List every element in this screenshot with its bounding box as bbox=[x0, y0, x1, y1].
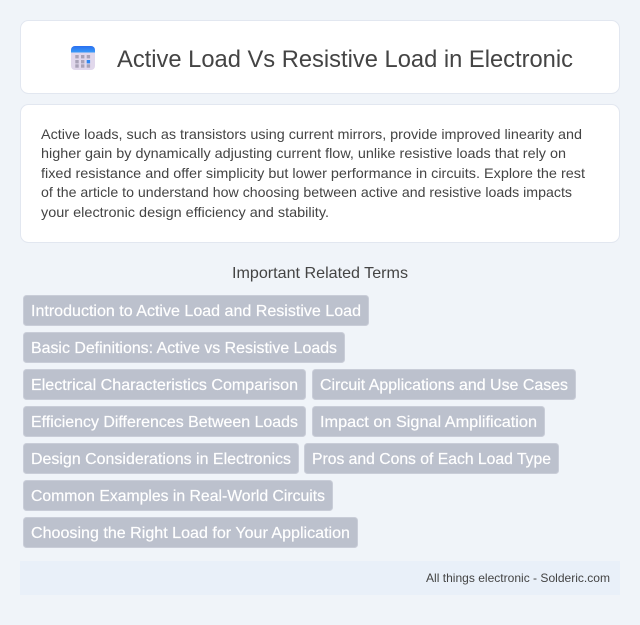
panel: intro text card bbox=[20, 104, 620, 242]
tag: common examples bbox=[24, 480, 332, 510]
tag: electrical characteristics: Electrical Characteristics Comparison bbox=[31, 377, 298, 394]
text block: intro paragraph: of the article to understand how choosing between active and resistive loads impacts bbox=[41, 184, 572, 200]
text block: intro paragraph: higher gain by dynamically adjusting current flow, unlike resistive loads that rely on bbox=[41, 145, 566, 161]
tag: efficiency differences bbox=[24, 406, 306, 436]
icon: calendar bbox=[71, 46, 95, 70]
footer: All things electronic - Solderic.com bbox=[426, 571, 610, 585]
tag: choosing the right load: Choosing the Right Load for Your Application bbox=[31, 525, 350, 542]
panel: title card bbox=[20, 20, 620, 94]
tag: basic definitions: Basic Definitions: Active vs Resistive Loads bbox=[31, 340, 337, 357]
tag: basic definitions bbox=[24, 332, 344, 362]
tag: signal amplification: Impact on Signal Amplification bbox=[320, 414, 537, 431]
tag: signal amplification bbox=[312, 406, 544, 436]
text block: intro paragraph: Active loads, such as transistors using current mirrors, provide improved linearity and bbox=[41, 126, 582, 142]
tag: pros and cons bbox=[304, 444, 558, 474]
text block: intro paragraph: your electronic design efficiency and stability. bbox=[41, 204, 329, 220]
text block: intro paragraph bbox=[41, 126, 585, 220]
tag: design considerations bbox=[24, 444, 298, 474]
tag: choosing the right load bbox=[24, 518, 358, 548]
tag: circuit applications bbox=[312, 370, 576, 400]
heading: related terms: Important Related Terms bbox=[232, 265, 408, 282]
title: Active Load Vs Resistive Load in Electronic bbox=[117, 46, 573, 73]
tag: pros and cons: Pros and Cons of Each Load Type bbox=[312, 451, 551, 468]
tag: electrical characteristics bbox=[24, 370, 306, 400]
tag: design considerations: Design Considerations in Electronics bbox=[31, 451, 291, 468]
tag: introduction: Introduction to Active Load and Resistive Load bbox=[31, 303, 361, 320]
panel: term tags bbox=[24, 296, 576, 548]
footer bbox=[20, 561, 620, 595]
tag: introduction bbox=[24, 296, 368, 326]
tag: efficiency differences: Efficiency Differences Between Loads bbox=[31, 414, 298, 431]
tag: circuit applications: Circuit Applications and Use Cases bbox=[320, 377, 568, 394]
text block: intro paragraph: fixed resistance and offer simplicity but lower performance in circuits. Explore the rest bbox=[41, 165, 585, 181]
tag: common examples: Common Examples in Real-World Circuits bbox=[31, 488, 325, 505]
